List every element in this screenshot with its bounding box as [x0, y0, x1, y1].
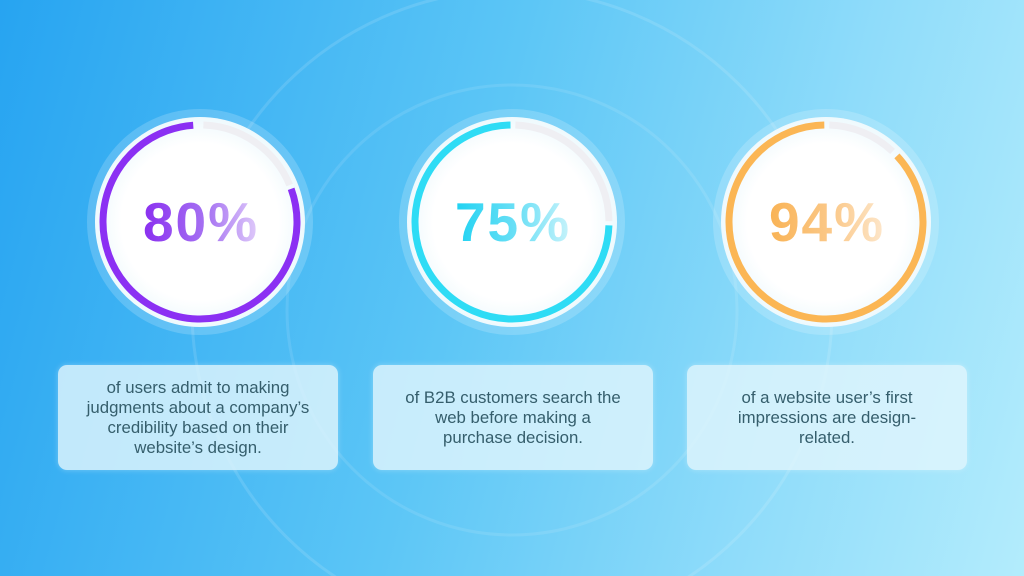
circle: 94%	[689, 85, 963, 359]
text box: 94%: of a website user’s first impressions are design-related.	[738, 388, 916, 446]
circle: 80%	[76, 98, 324, 346]
text box: 75%	[373, 365, 653, 470]
text box: 80%: of users admit to making judgments about a company’s credibility based on their website’s design.	[87, 378, 309, 456]
circle: 94%: 94%	[769, 191, 885, 253]
circle: 75%	[399, 109, 625, 335]
circle: 75%: 75%	[455, 191, 571, 253]
text box: 75%: of B2B customers search the web before making a purchase decision.	[405, 388, 621, 446]
text box: 94%	[687, 365, 967, 470]
circle: 80%: 80%	[143, 191, 259, 253]
text box: 80%	[58, 365, 338, 470]
